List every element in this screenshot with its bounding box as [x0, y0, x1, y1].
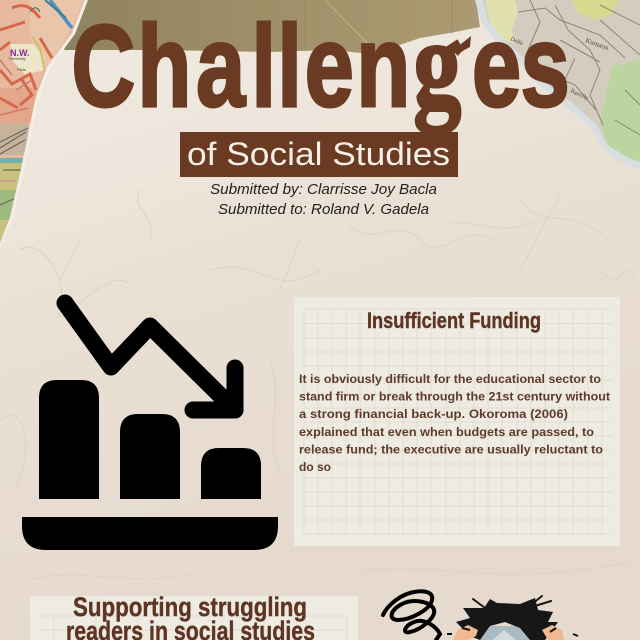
- icon: dizzy scribble: [383, 591, 440, 640]
- title: es: [472, 1, 570, 131]
- map: top right: Kumaon: [584, 36, 610, 52]
- map: top right: Delhi: [509, 36, 524, 48]
- panel: insufficient funding: [294, 297, 620, 546]
- panel: supporting struggling readers: [30, 592, 358, 640]
- map: top right: Bareilly: [569, 88, 589, 102]
- heading: insufficient funding: Insufficient Funding: [367, 308, 541, 333]
- text block: funding explanation: do so: [299, 460, 331, 474]
- submission credits: Submitted by: Clarrisse Joy Bacla: [210, 181, 437, 198]
- submission credits: [210, 181, 437, 218]
- text block: funding explanation: stand firm or break through the 21st century without: [299, 390, 610, 404]
- heading: supporting struggling readers: [66, 592, 315, 640]
- subtitle banner: [180, 132, 458, 177]
- submission credits: Submitted to: Roland V. Gadela: [218, 201, 429, 218]
- title: [71, 0, 570, 134]
- torn kraft paper: [64, 0, 480, 54]
- title: Challen: [71, 1, 410, 131]
- text block: funding explanation: It is obviously difficult for the educational sector to: [299, 372, 601, 386]
- subtitle banner: of Social Studies: [187, 136, 450, 172]
- icon: declining bar chart: [22, 303, 278, 550]
- illustration: stressed person: [447, 596, 578, 640]
- text block: funding explanation: explained that even when budgets are passed, to: [299, 425, 594, 439]
- map: top left: Reversity: [9, 56, 26, 61]
- text block: funding explanation: release fund; the executive are usually reluctant to: [299, 442, 603, 456]
- heading: supporting struggling readers: Supporting struggling: [73, 592, 307, 622]
- map: top left: [0, 0, 90, 246]
- map: top left: N.W.: [10, 48, 30, 58]
- map: top left: Plats: [17, 67, 26, 72]
- text block: funding explanation: a strong financial back-up. Okoroma (2006): [299, 407, 568, 421]
- text block: funding explanation: [299, 372, 610, 474]
- map: top right: [470, 0, 640, 170]
